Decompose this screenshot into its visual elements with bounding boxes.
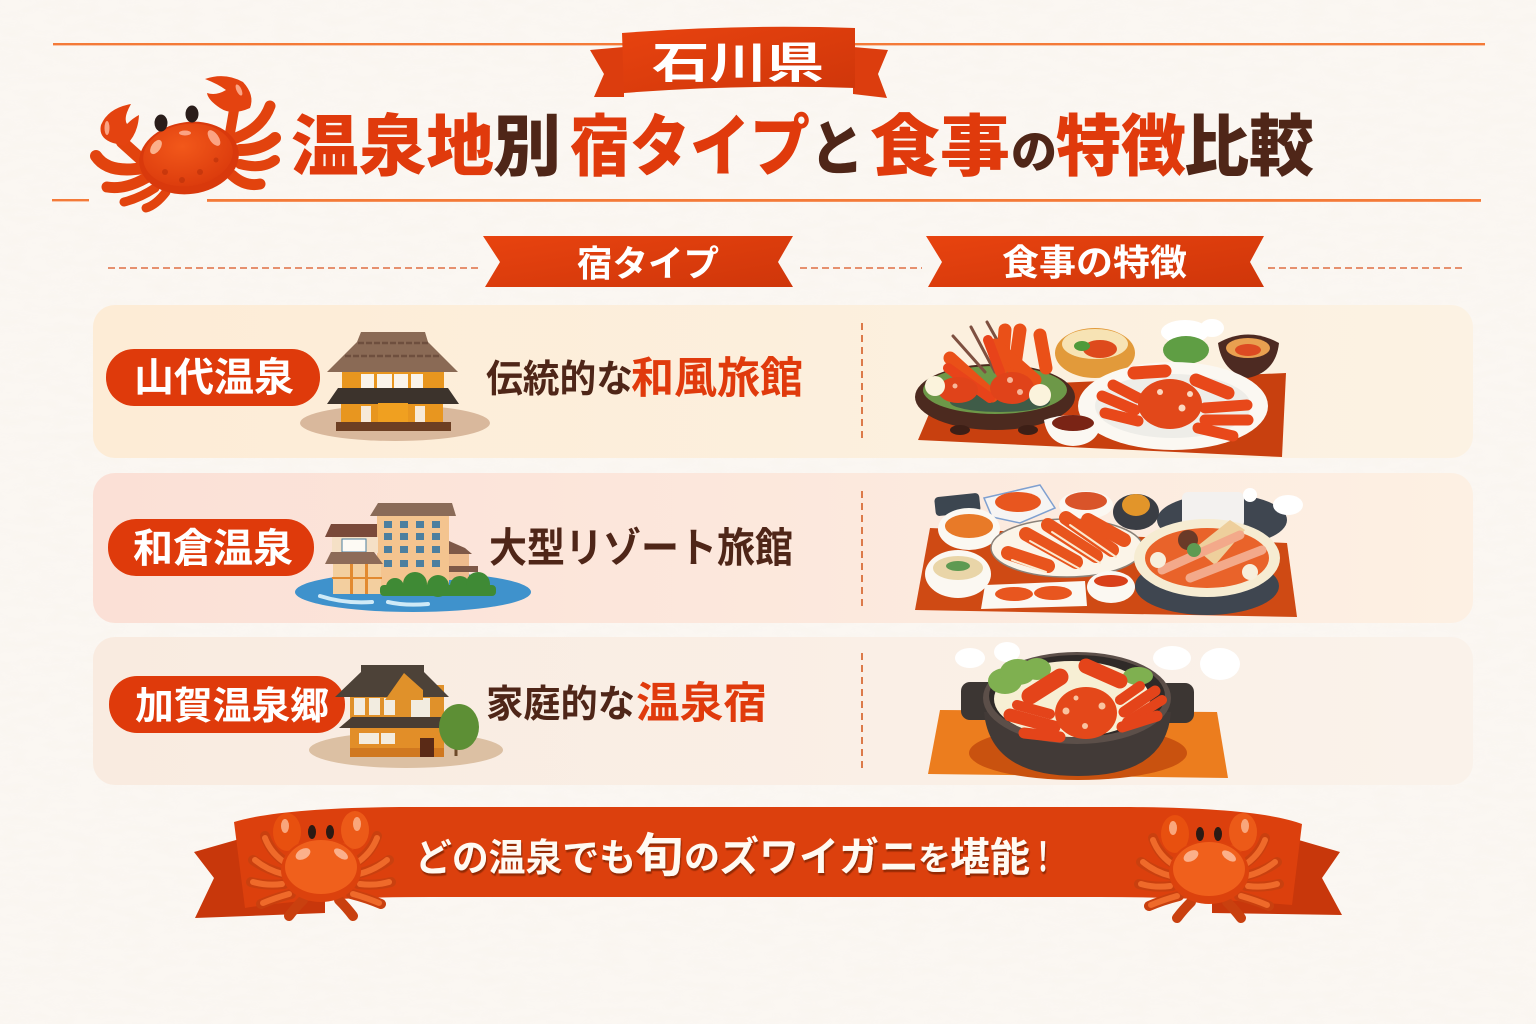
banner slogan: ！ <box>1030 836 1056 880</box>
vertical divider <box>861 653 863 770</box>
room type text: 伝統的な <box>486 359 633 401</box>
header rule lines <box>52 43 1485 202</box>
label pill: 和倉温泉 <box>108 519 314 576</box>
banner slogan: ズワイガニ <box>719 834 919 880</box>
food illustration: seafood spread with hot pot <box>915 485 1303 617</box>
room type text <box>486 680 767 728</box>
banner slogan: を <box>918 840 951 877</box>
room type text: 家庭的な <box>486 684 635 726</box>
title: 食事 <box>870 110 1010 185</box>
banner slogan: どの温泉でも <box>415 838 636 880</box>
prefecture ribbon: 石川県 <box>590 27 888 98</box>
label pill: 加賀温泉郷: 加賀温泉郷 <box>135 686 329 728</box>
title: 宿タイプ <box>570 110 810 185</box>
food illustration: crab hot pot <box>928 642 1240 780</box>
column heading: 食事の特徴 <box>926 236 1264 287</box>
dashed column rules <box>108 267 1462 269</box>
icon: large resort hotel on water <box>295 503 531 612</box>
vertical divider <box>861 323 863 442</box>
label pill: 和倉温泉: 和倉温泉 <box>133 527 293 571</box>
title: 比較 <box>1184 110 1314 185</box>
title <box>291 110 1314 185</box>
room type text: 大型リゾート旅館 <box>489 525 793 571</box>
icon: banner crab right <box>1139 813 1279 918</box>
label pill: 山代温泉: 山代温泉 <box>134 356 294 400</box>
panel: 山代温泉 row <box>93 305 1473 458</box>
label pill: 加賀温泉郷 <box>109 676 345 733</box>
room type text: 和風旅館 <box>631 355 803 403</box>
banner slogan: 堪能 <box>950 836 1030 880</box>
icon: title crab <box>96 76 275 208</box>
title: 温泉地 <box>291 110 494 185</box>
vertical divider <box>861 491 863 611</box>
room type text: 温泉宿 <box>636 680 767 728</box>
panel: 和倉温泉 row <box>93 473 1473 623</box>
banner slogan: の <box>684 839 720 877</box>
title: 特徴 <box>1056 110 1186 185</box>
column heading: 食事の特徴: 食事の特徴 <box>1002 242 1187 283</box>
column heading: 宿タイプ: 宿タイプ <box>577 243 719 284</box>
panel: 加賀温泉郷 row <box>93 637 1473 785</box>
label pill: 山代温泉 <box>106 349 320 406</box>
icon: traditional ryokan <box>300 332 490 441</box>
title: 別 <box>493 110 561 185</box>
bottom banner <box>194 807 1342 918</box>
icon: family onsen inn <box>309 665 503 768</box>
food illustration: crab legs and whole crab set <box>915 319 1286 457</box>
column heading: 宿タイプ <box>483 236 793 287</box>
prefecture ribbon: 石川県: 石川県 <box>652 40 824 88</box>
title: と <box>810 116 864 183</box>
room type text <box>486 355 803 403</box>
banner slogan: 旬 <box>635 829 683 882</box>
banner slogan <box>415 829 1056 882</box>
icon: banner crab left <box>251 811 391 916</box>
title: の <box>1011 126 1057 178</box>
